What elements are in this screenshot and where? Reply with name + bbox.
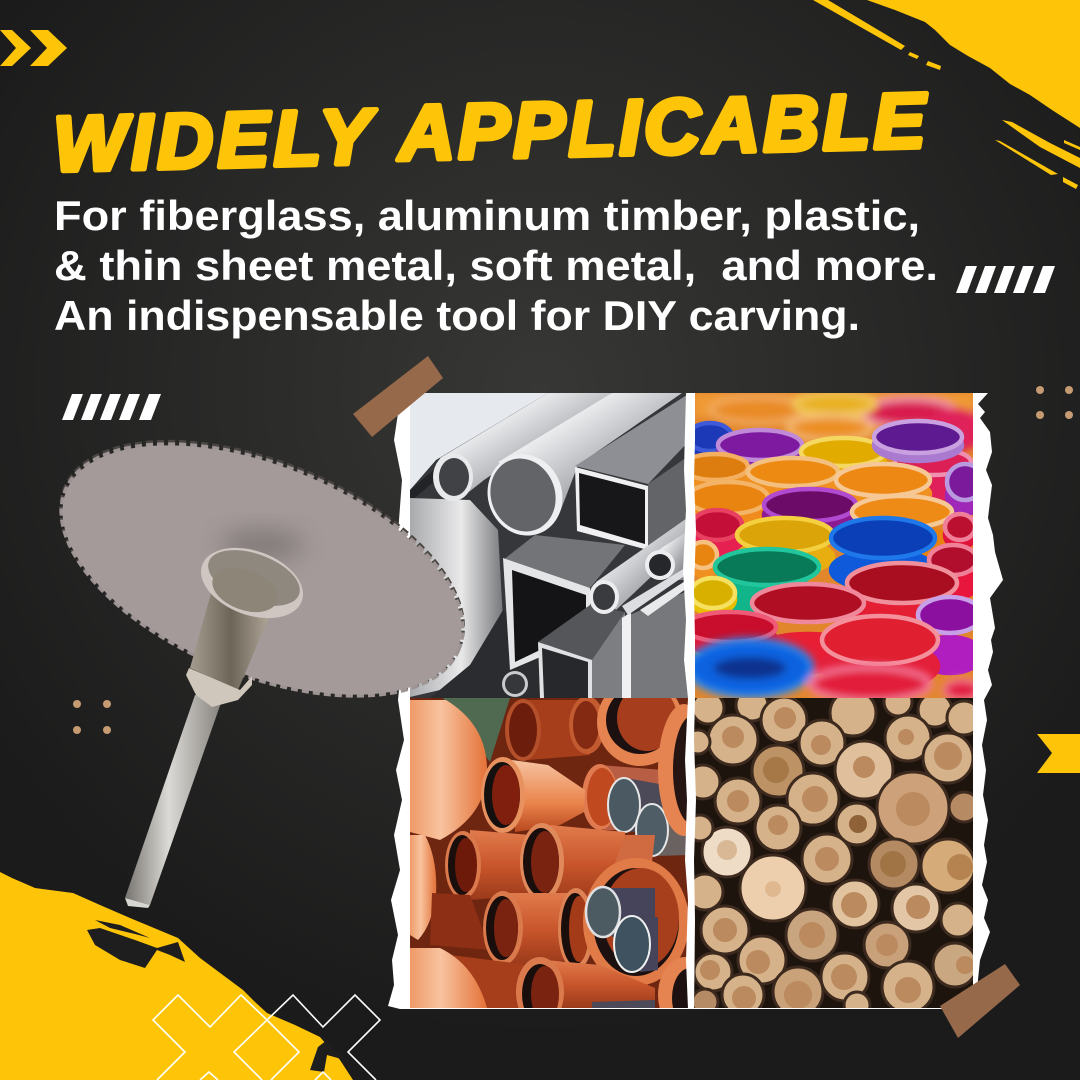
mandrel shaft xyxy=(190,590,272,690)
square tube large xyxy=(575,393,690,550)
icon: dots left xyxy=(73,700,111,734)
mandrel collar xyxy=(186,668,252,707)
log heartwood xyxy=(700,707,974,1010)
foliage gap xyxy=(443,698,510,762)
small round tubes xyxy=(502,516,690,697)
log faces xyxy=(694,698,973,1008)
photo: plastic bottle caps xyxy=(682,393,985,701)
brush stroke: top right yellow corner xyxy=(813,0,1080,189)
photo: stacked logs xyxy=(694,698,973,1008)
description text: For fiberglass, aluminum timber, plastic, xyxy=(54,192,920,239)
tape: bottom right xyxy=(940,964,1020,1038)
photo: aluminum tubes xyxy=(410,393,690,698)
pale pipe with socket xyxy=(481,757,585,833)
upper pale pipe xyxy=(410,700,487,840)
icon: white slashes right xyxy=(956,266,1055,293)
blurred front caps xyxy=(688,640,980,701)
product: cutting disc with mandrel xyxy=(27,393,497,908)
hub flange xyxy=(191,535,313,631)
title xyxy=(52,76,928,188)
saw blade teeth xyxy=(27,393,497,743)
lower row pipes xyxy=(430,888,594,970)
description text xyxy=(54,192,938,339)
brush stroke: bottom left yellow corner xyxy=(0,872,380,1080)
square tube right xyxy=(622,590,690,698)
title: WIDELY xyxy=(52,92,378,188)
dark brush slash xyxy=(87,928,185,968)
square tube middle xyxy=(503,535,625,670)
icon: yellow ribbon right xyxy=(1037,734,1080,773)
mandrel shank xyxy=(125,695,222,905)
grey-backed pipe xyxy=(582,764,688,856)
title: APPLICABLE xyxy=(395,76,928,177)
torn white paper backing xyxy=(388,393,1003,1009)
lower left pale pipe xyxy=(410,835,436,940)
tube end large xyxy=(488,454,562,536)
icon: chevrons top left xyxy=(0,30,67,66)
white cross outlines xyxy=(153,995,380,1080)
middle row pipes xyxy=(445,823,655,905)
square tube small xyxy=(538,605,625,698)
reflective floor xyxy=(410,498,503,697)
right rim pipe xyxy=(658,704,688,836)
big socket with grey pipes xyxy=(583,858,689,986)
light backdrop xyxy=(410,393,548,490)
bottom row pipes xyxy=(410,948,688,1008)
tube end small xyxy=(433,453,473,501)
saw blade body xyxy=(27,395,497,745)
blurred rear caps xyxy=(693,393,985,452)
blade shadow near hub xyxy=(220,529,304,561)
photo: orange pipes xyxy=(410,698,688,1008)
description text: & thin sheet metal, soft metal, and more. xyxy=(54,242,938,289)
sharp caps xyxy=(682,421,983,664)
long tube bodies xyxy=(440,393,612,495)
torn white strip between photos xyxy=(683,393,696,1009)
icon: dots right xyxy=(1036,386,1073,419)
tape: top xyxy=(353,356,443,437)
description text: An indispensable tool for DIY carving. xyxy=(54,292,860,339)
top dark pipes xyxy=(505,698,680,766)
icon: white slashes left xyxy=(62,394,161,420)
